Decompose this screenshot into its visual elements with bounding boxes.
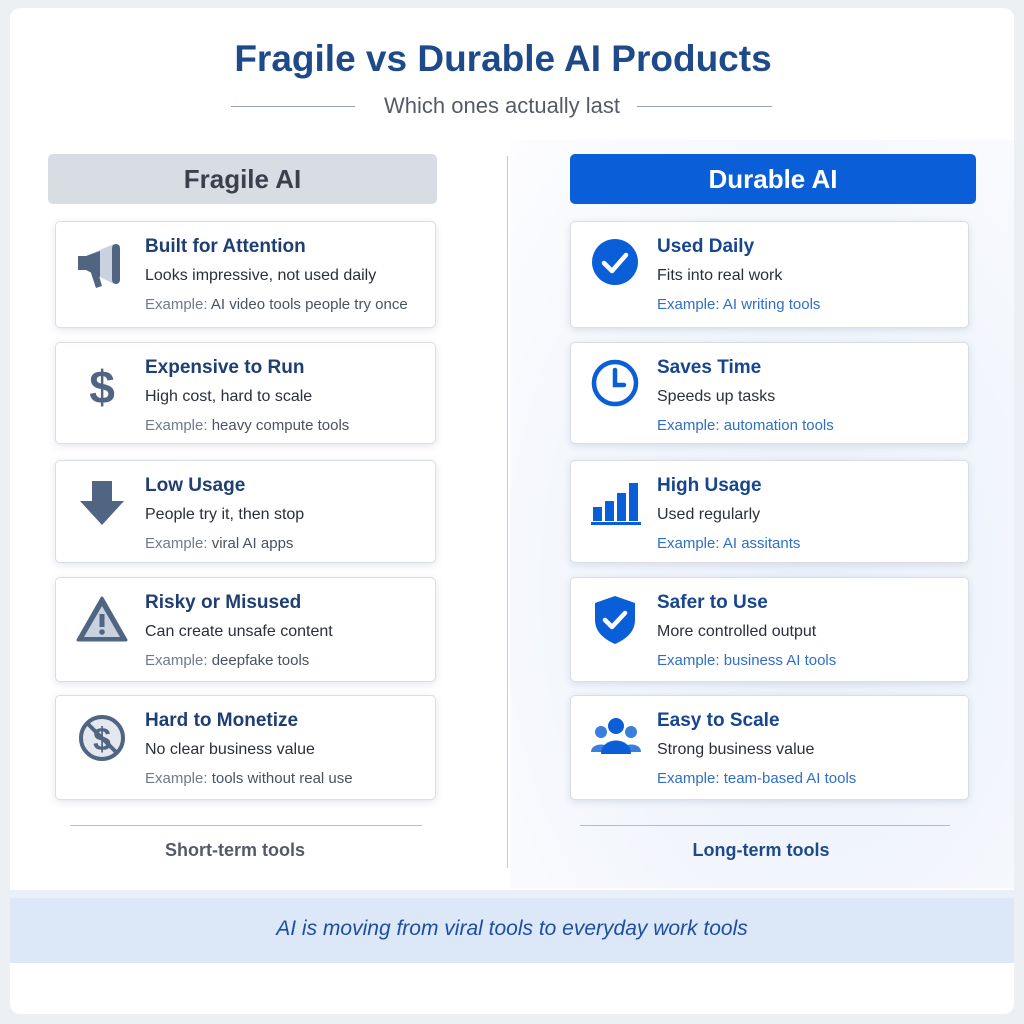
- card: Built for Attention: Example: AI video tools people try once: [145, 296, 408, 313]
- icon: no dollar: [79, 715, 125, 761]
- card: Saves Time: Example: automation tools: [657, 417, 834, 434]
- card: Safer to Use: More controlled output: [657, 623, 816, 640]
- header: Fragile AI: Fragile AI: [184, 164, 301, 194]
- subtitle: Which ones actually last: [384, 93, 620, 118]
- card: Built for Attention: [55, 221, 436, 328]
- card: Safer to Use: Safer to Use: [657, 592, 768, 613]
- card: Risky or Misused: Risky or Misused: [145, 592, 301, 613]
- card: High Usage: [570, 460, 969, 563]
- card: High Usage: High Usage: [657, 475, 762, 496]
- card: Used Daily: Example: AI writing tools: [657, 296, 820, 313]
- label: Long-term tools: Long-term tools: [692, 840, 830, 860]
- icon: clock: [592, 360, 638, 406]
- card: Risky or Misused: Can create unsafe content: [145, 623, 333, 640]
- card: Low Usage: [55, 460, 436, 563]
- card: Low Usage: People try it, then stop: [145, 506, 304, 523]
- card: Hard to Monetize: [55, 695, 436, 800]
- label: Short-term tools: Short-term tools: [165, 840, 305, 860]
- card: Risky or Misused: [55, 577, 436, 682]
- card: Easy to Scale: Strong business value: [657, 741, 814, 758]
- card: High Usage: Example: AI assitants: [657, 535, 800, 552]
- card: High Usage: Used regularly: [657, 506, 760, 523]
- header: Fragile AI: [48, 154, 437, 204]
- icon: megaphone: [78, 244, 120, 288]
- bottom banner: [10, 890, 1014, 963]
- title: Fragile vs Durable AI Products: [234, 38, 772, 79]
- card: Built for Attention: Built for Attention: [145, 236, 306, 257]
- card: Saves Time: Saves Time: [657, 357, 761, 378]
- header: Durable AI: Durable AI: [708, 164, 838, 194]
- card: Risky or Misused: Example: deepfake tools: [145, 652, 309, 669]
- card: Used Daily: [570, 221, 969, 328]
- card: Used Daily: Fits into real work: [657, 267, 782, 284]
- bottom banner: AI is moving from viral tools to everyday work tools: [276, 917, 748, 940]
- card: Safer to Use: [570, 577, 969, 682]
- icon: check circle: [592, 239, 638, 285]
- icon: warning: [76, 596, 128, 642]
- icon: shield: [595, 596, 635, 644]
- card: Easy to Scale: Example: team-based AI tools: [657, 770, 856, 787]
- header: Durable AI: [570, 154, 976, 204]
- card: Saves Time: [570, 342, 969, 444]
- card: Expensive to Run: Expensive to Run: [145, 357, 304, 378]
- card: Hard to Monetize: Example: tools without real use: [145, 770, 353, 787]
- icon: down arrow: [80, 481, 124, 525]
- card: Expensive to Run: High cost, hard to scale: [145, 388, 312, 405]
- card: Hard to Monetize: No clear business value: [145, 741, 315, 758]
- icon: team: [591, 718, 641, 754]
- icon: no dollar: $: [93, 721, 111, 757]
- card: Expensive to Run: Example: heavy compute tools: [145, 417, 349, 434]
- card: Hard to Monetize: Hard to Monetize: [145, 710, 298, 731]
- card: Saves Time: Speeds up tasks: [657, 388, 775, 405]
- card: Used Daily: Used Daily: [657, 236, 754, 257]
- card: Safer to Use: Example: business AI tools: [657, 652, 836, 669]
- card: Low Usage: Low Usage: [145, 475, 245, 496]
- card: Easy to Scale: Easy to Scale: [657, 710, 780, 731]
- card: Expensive to Run: [55, 342, 436, 444]
- card: Low Usage: Example: viral AI apps: [145, 535, 293, 552]
- card: Easy to Scale: [570, 695, 969, 800]
- icon: bar chart: [591, 483, 641, 525]
- card: Built for Attention: Looks impressive, not used daily: [145, 267, 376, 284]
- right background glow: [510, 140, 1014, 888]
